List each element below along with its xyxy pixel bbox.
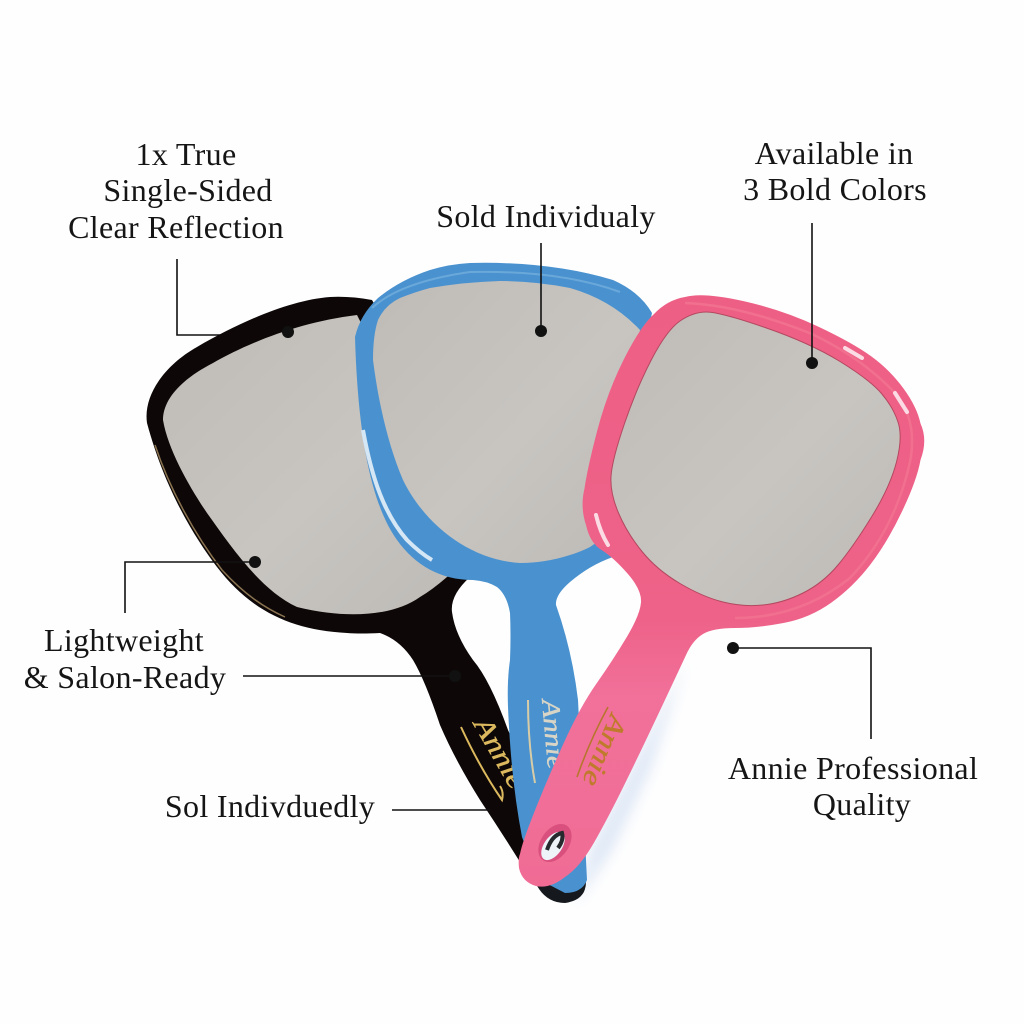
callout: sold individually lower: Sol Indivduedly <box>165 788 375 824</box>
callout: colors <box>743 135 927 369</box>
blue handle logo: Annie <box>535 696 570 770</box>
pink frame rim <box>685 303 912 618</box>
pink frame highlights <box>596 348 907 545</box>
callout: sold individually <box>436 198 656 337</box>
callout: single-sided: Clear Reflection <box>68 209 284 245</box>
callout: single-sided <box>68 136 294 338</box>
pink handle logo: Annie <box>576 709 633 791</box>
soft shadow <box>575 660 686 905</box>
pink mirror <box>519 295 924 887</box>
callout: lightweight <box>24 556 461 695</box>
callout: colors: Available in <box>755 135 913 171</box>
black frame highlight <box>155 445 285 617</box>
callout: quality: Quality <box>813 786 911 822</box>
black handle logo: Annie <box>466 710 533 794</box>
hanging hole <box>531 818 579 868</box>
callout: lightweight: & Salon-Ready <box>24 659 226 695</box>
black mirror glass <box>163 315 470 614</box>
blue mirror body <box>355 263 652 893</box>
blue handle logo <box>528 696 570 783</box>
callout: lightweight: Lightweight <box>44 622 204 658</box>
black base under the handles <box>535 882 586 903</box>
dot <box>282 326 294 338</box>
black mirror <box>147 297 540 875</box>
callout: colors: 3 Bold Colors <box>743 171 927 207</box>
pink mirror glass <box>611 312 900 606</box>
black mirror body <box>147 297 540 875</box>
pink mirror body <box>519 295 924 887</box>
blue mirror <box>355 263 652 893</box>
callout: quality <box>727 642 978 822</box>
label: 1x True <box>135 136 237 172</box>
leader line to black mirror top <box>177 259 230 335</box>
callout: single-sided: Single-Sided <box>103 172 273 208</box>
blue frame highlight <box>363 430 432 560</box>
callout: sold individually: Sold Individualy <box>436 198 656 234</box>
blue mirror glass <box>373 281 640 563</box>
callout: quality: Annie Professional <box>728 750 978 786</box>
